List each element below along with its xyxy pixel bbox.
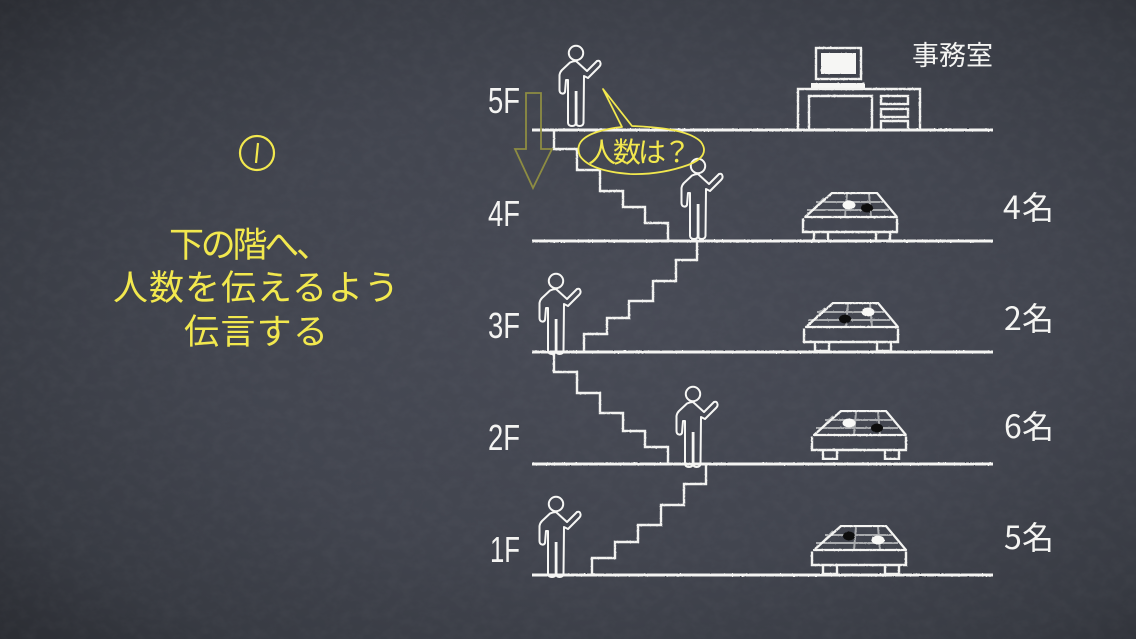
figure: person on 4F	[682, 159, 723, 239]
label: office: 事務室	[912, 34, 993, 73]
text block: instruction: 人数を伝えるよう	[113, 260, 399, 311]
text block: instruction: 下の階へ、	[169, 217, 331, 268]
icon: go board on 2F	[812, 411, 906, 459]
floor labels: 1F	[490, 529, 520, 570]
count: 2F: 6名	[1004, 402, 1054, 448]
text block: instruction	[113, 217, 399, 355]
heading: step number 1	[240, 136, 274, 170]
arrow: downward	[515, 93, 552, 188]
floor labels: 3F	[488, 305, 520, 346]
count: 1F: 5名	[1004, 513, 1054, 559]
icon: go board on 3F	[804, 303, 898, 351]
stairs: 2F to 1F	[592, 464, 706, 575]
stairs: 5F to 4F	[554, 130, 668, 241]
figure: person on 1F	[540, 497, 581, 577]
count: 3F: 2名	[1004, 294, 1054, 340]
figure: person on 3F	[540, 274, 581, 354]
floor labels: 4F	[488, 193, 520, 234]
stairs: 3F to 2F	[554, 352, 668, 464]
icon: go board on 1F	[812, 526, 906, 574]
figure: person on 2F	[676, 387, 718, 467]
stairs: 4F to 3F	[584, 241, 697, 352]
count: 4F: 4名	[1003, 183, 1054, 229]
speech bubble: 人数は？	[578, 89, 704, 174]
floor labels: 2F	[488, 417, 520, 458]
text block: instruction: 伝言する	[184, 304, 328, 355]
speech bubble: 人数は？: 人数は？	[588, 131, 691, 171]
floor lines	[532, 130, 993, 575]
icon: go board on 4F	[803, 193, 897, 241]
icon: office desk and computer	[798, 48, 920, 130]
floor labels: 5F	[488, 80, 520, 121]
figure: person on 5F	[560, 46, 601, 126]
floor labels	[488, 80, 520, 570]
